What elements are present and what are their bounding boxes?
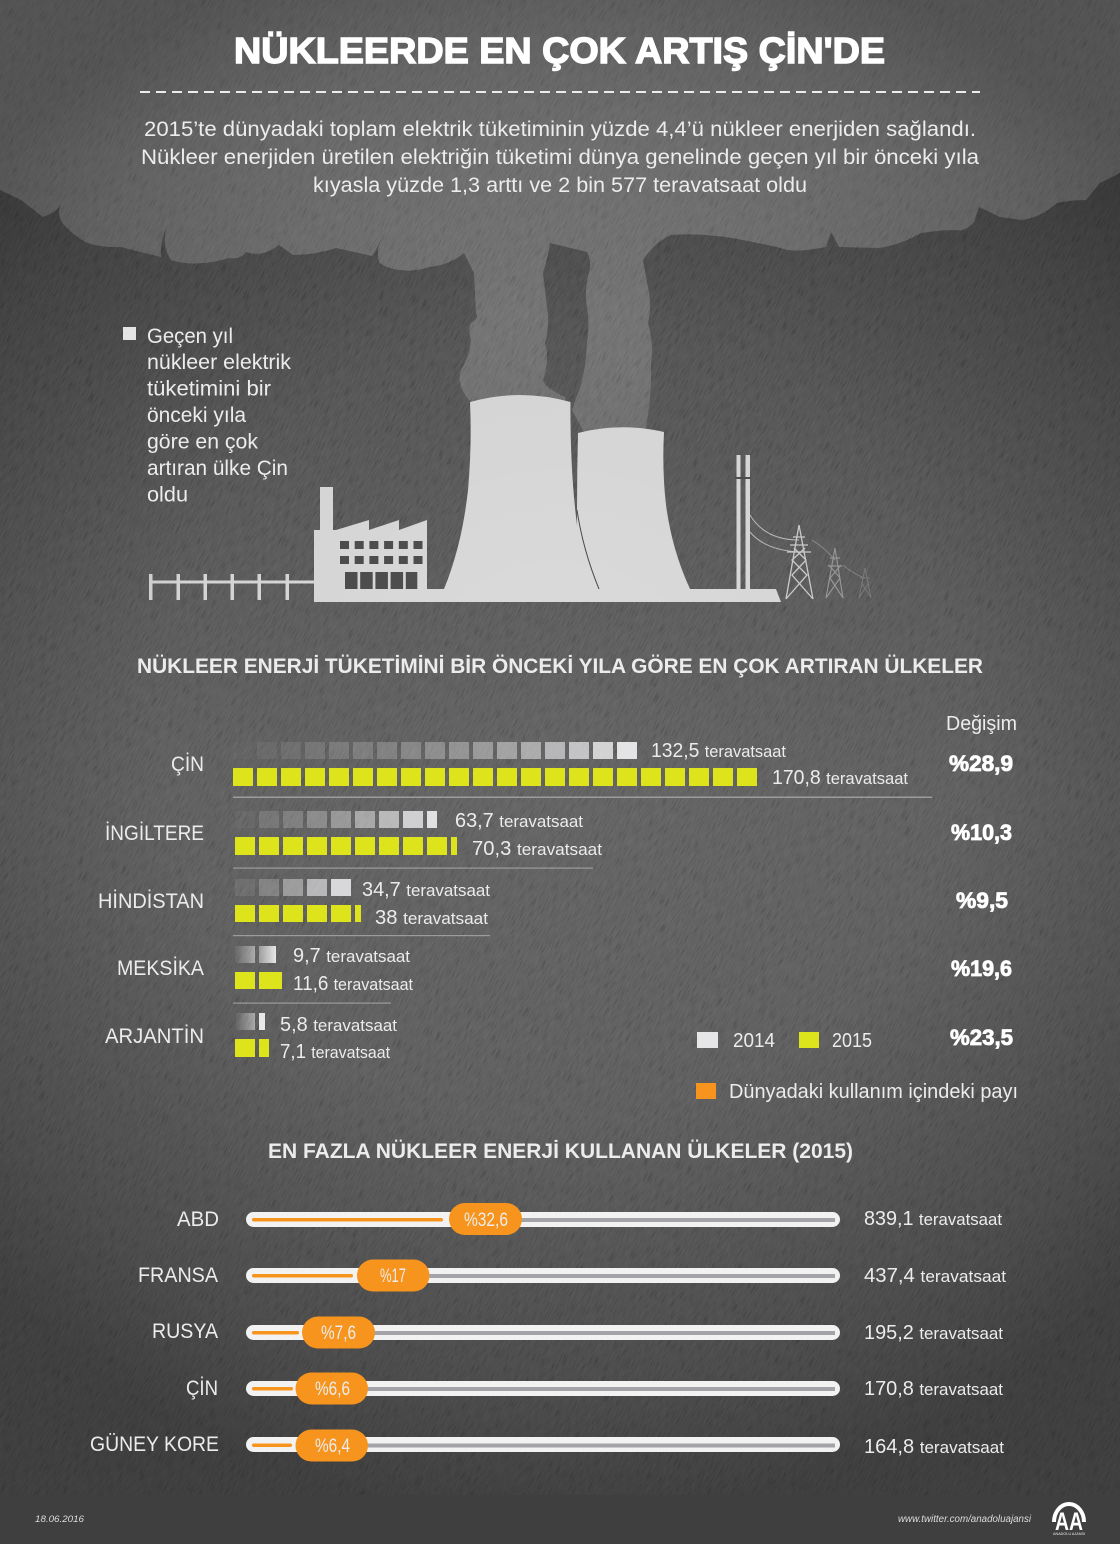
side note text: Geçen yıl (147, 325, 233, 348)
heading: bar chart: NÜKLEER ENERJİ TÜKETİMİNİ BİR ÖNCEKİ YILA GÖRE EN ÇOK ARTIRAN ÜLKELER (137, 655, 983, 678)
row: UK (105, 810, 1012, 869)
factory building (314, 487, 427, 589)
row: Mexico: %19,6 (951, 956, 1012, 981)
logo: Anadolu Agency: ANADOLU AJANSI (1053, 1532, 1085, 1536)
side note text: tüketimini bir (147, 378, 271, 400)
row: China: 170,8 teravatsaat (864, 1378, 1003, 1400)
row: Russia: 195,2 teravatsaat (864, 1322, 1003, 1344)
row: Argentina: 5,8 teravatsaat (280, 1014, 397, 1036)
dark gap between plumes (543, 243, 590, 470)
factory windows (340, 541, 422, 589)
cooling tower: right (577, 427, 690, 589)
row: India: HİNDİSTAN (98, 890, 204, 913)
row: Mexico: 9,7 teravatsaat (293, 945, 410, 967)
row: India: %9,5 (956, 888, 1008, 913)
row: Mexico (117, 945, 1012, 1004)
row: India: 38 teravatsaat (375, 907, 488, 929)
row: Mexico: MEKSİKA (117, 957, 204, 980)
row: Argentina: %23,5 (950, 1025, 1013, 1050)
footer bar (0, 1495, 1120, 1544)
legend (696, 1030, 1018, 1103)
row: Argentina: 7,1 teravatsaat (280, 1041, 390, 1063)
row: China (186, 1372, 1003, 1404)
row: Mexico: 11,6 teravatsaat (293, 973, 413, 995)
row: Argentina (105, 1013, 1013, 1063)
row: China (171, 740, 1013, 798)
row: China: ÇİN (186, 1377, 218, 1400)
row: India: 34,7 teravatsaat (362, 879, 490, 901)
row: Argentina: ARJANTİN (105, 1025, 204, 1048)
pylon: near (786, 525, 813, 599)
row: China: ÇİN (171, 753, 204, 776)
legend: world share: Dünyadaki kullanım içindeki payı (729, 1081, 1018, 1103)
intro text: kıyasla yüzde 1,3 arttı ve 2 bin 577 teravatsaat oldu (313, 174, 807, 197)
ground platform (314, 589, 781, 602)
side note text: önceki yıla (147, 404, 246, 427)
row: UK: İNGİLTERE (105, 822, 204, 845)
column label: change: Değişim (946, 713, 1017, 735)
row: USA: 839,1 teravatsaat (864, 1208, 1002, 1230)
row: UK: 63,7 teravatsaat (455, 810, 583, 832)
row: UK: %10,3 (951, 820, 1012, 845)
legend: 2015: 2015 (832, 1030, 872, 1052)
row: France: 437,4 teravatsaat (864, 1265, 1006, 1287)
row: China: 132,5 teravatsaat (651, 740, 786, 762)
pylon: far (859, 568, 871, 598)
smoke cloud and plumes (0, 0, 1120, 442)
power lines (750, 515, 865, 578)
row: Russia (152, 1316, 1003, 1348)
row: India (98, 879, 1008, 936)
row: France: %17 (380, 1266, 406, 1287)
side note text: nükleer elektrik (147, 351, 292, 374)
pylon: middle (826, 548, 843, 598)
row: South Korea: %6,4 (315, 1436, 350, 1457)
row: USA: ABD (177, 1208, 219, 1231)
title: NÜKLEERDE EN ÇOK ARTIŞ ÇİN'DE (234, 30, 885, 71)
heading: top users: EN FAZLA NÜKLEER ENERJİ KULLANAN ÜLKELER (2015) (268, 1140, 853, 1163)
bullet (123, 327, 136, 340)
row: South Korea (90, 1430, 1004, 1462)
side note (123, 325, 292, 506)
cooling tower: left (444, 395, 599, 589)
source link: www.twitter.com/anadoluajansi (898, 1514, 1032, 1525)
legend: 2014 (697, 1030, 775, 1052)
row: France: FRANSA (138, 1264, 218, 1287)
legend: 2014: 2014 (733, 1030, 775, 1052)
row: South Korea: GÜNEY KORE (90, 1433, 219, 1456)
row: China: %28,9 (949, 751, 1013, 776)
intro text: 2015’te dünyadaki toplam elektrik tüketiminin yüzde 4,4’ü nükleer enerjiden sağlandı. (144, 118, 976, 141)
row: Russia: %7,6 (321, 1323, 356, 1344)
side note text: artıran ülke Çin (147, 457, 288, 480)
row: China: 170,8 teravatsaat (772, 767, 908, 789)
side note text: oldu (147, 484, 188, 506)
intro text: Nükleer enerjiden üretilen elektriğin tüketimi dünya genelinde geçen yıl bir önceki yıla (141, 146, 979, 169)
logo: Anadolu Agency: AA (1055, 1508, 1083, 1536)
row: USA (177, 1203, 1002, 1235)
row: Russia: RUSYA (152, 1320, 218, 1343)
twin poles (735, 455, 751, 589)
dashed rule (140, 91, 980, 93)
bar chart: countries (98, 740, 1013, 1063)
row: France (138, 1260, 1006, 1292)
nuclear plant illustration (149, 395, 781, 602)
legend: 2015 (799, 1030, 872, 1052)
row: China: %6,6 (315, 1379, 350, 1400)
footer (0, 1495, 1120, 1544)
side note text (147, 325, 292, 506)
tower edge line (577, 510, 599, 589)
side note text: göre en çok (147, 430, 258, 454)
intro text (141, 118, 979, 197)
row: USA: %32,6 (464, 1210, 508, 1231)
slider chart (90, 1203, 1006, 1462)
date: 18.06.2016 (35, 1514, 85, 1525)
row: South Korea: 164,8 teravatsaat (864, 1436, 1004, 1458)
fence (149, 574, 314, 600)
row: UK: 70,3 teravatsaat (472, 838, 602, 860)
